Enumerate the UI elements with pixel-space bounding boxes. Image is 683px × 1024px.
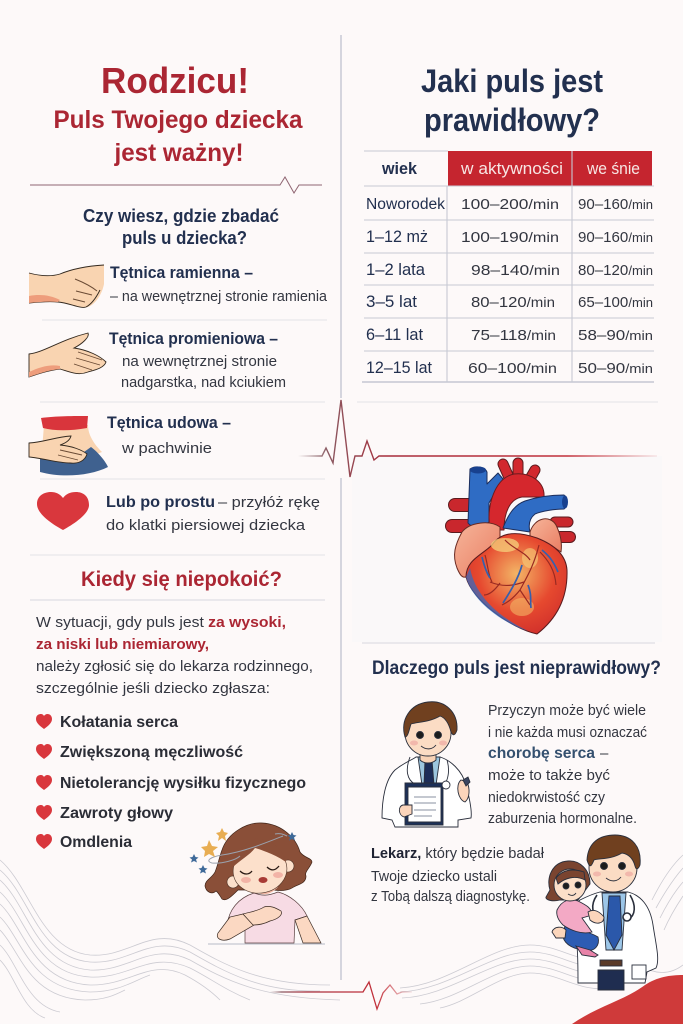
row: 1-12 months: 100–190 /min: [461, 229, 559, 246]
row: 1-2 years: 98–140 /min: [471, 262, 560, 279]
text block: doctor diagnosis: Lekarz, który będzie badał: [371, 845, 545, 862]
icon: belly and hand: [29, 416, 108, 475]
title: Rodzicu!: [101, 60, 249, 101]
title: Puls Twojego dziecka: [54, 106, 304, 134]
row: 12-15 years: 50–90 /min: [578, 360, 653, 377]
heading: why abnormal: Dlaczego puls jest nieprawidłowy?: [372, 658, 661, 679]
panel: hand on chest: – przyłóż rękę: [218, 494, 320, 511]
row: newborn: 90–160/min: [578, 196, 653, 213]
table header: w aktywności: [460, 160, 563, 178]
row: 12-15 years: 12–15 lat: [366, 359, 432, 377]
side vessels: [452, 505, 570, 537]
face: [227, 876, 239, 888]
panel: radial artery: na wewnętrznej stronie: [122, 353, 277, 370]
text block: causes: niedokrwistość czy: [488, 789, 605, 806]
panel: femoral artery: Tętnica udowa –: [107, 414, 231, 432]
panel: femoral artery: w pachwinie: [121, 440, 212, 457]
text block: when to see a doctor: za niski lub niemiarowy,: [36, 636, 209, 653]
row: 1-2 years: 80–120/min: [578, 262, 653, 279]
text block: doctor diagnosis: Twoje dziecko ustali: [371, 868, 497, 885]
heading: where to check: Czy wiesz, gdzie zbadać: [83, 205, 279, 226]
pulmonary artery: [503, 495, 567, 532]
coronary vessels: [484, 540, 556, 605]
table: pulse by age: [362, 151, 654, 382]
heading: what pulse is normal: prawidłowy?: [424, 102, 600, 138]
illustration: dizzy girl: [190, 823, 325, 944]
symptoms list: [36, 714, 306, 851]
arms: [217, 914, 321, 943]
child: [563, 925, 598, 950]
illustration: doctor holding child: [546, 835, 658, 990]
text block: causes: Przyczyn może być wiele: [488, 702, 646, 719]
item: exercise intolerance: Nietolerancję wysiłku fizycznego: [60, 775, 306, 792]
text block: causes: chorobę serca: [488, 745, 595, 762]
text block: causes: zaburzenia hormonalne.: [488, 810, 637, 827]
row: 6-11 years: [366, 326, 653, 344]
heading: where to check: [83, 205, 279, 248]
table header: we śnie: [586, 160, 640, 178]
item: fainting: Omdlenia: [60, 834, 132, 851]
vena cava: [468, 467, 503, 527]
aortic arch: [489, 474, 544, 530]
heart panel background: [352, 456, 662, 642]
text block: doctor diagnosis: [371, 845, 545, 905]
text block: causes: –: [600, 745, 609, 762]
row: newborn: Noworodek: [366, 196, 445, 213]
row: newborn: [366, 196, 653, 213]
panel: femoral artery: [29, 414, 231, 475]
row: 1-2 years: [366, 261, 653, 279]
title: jest ważny!: [114, 139, 243, 167]
ECG divider under title: [30, 177, 322, 193]
item: palpitations: Kołatania serca: [60, 714, 178, 731]
row: 1-12 months: 1–12 mż: [366, 228, 428, 246]
row: 1-12 months: 90–160/min: [578, 229, 653, 246]
panel: brachial artery: – na wewnętrznej stronie ramienia: [110, 288, 328, 305]
row: 3-5 years: [366, 293, 653, 311]
central ECG line: [298, 400, 657, 477]
panel: radial artery: [29, 330, 286, 391]
heading: where to check: puls u dziecka?: [122, 227, 247, 248]
background wave lines: bottom left: [0, 860, 340, 1018]
panel: brachial artery: [29, 264, 328, 307]
icon: open hand: [29, 333, 106, 377]
panel: radial artery: nadgarstka, nad kciukiem: [121, 374, 286, 391]
row: 6-11 years: 58–90 /min: [578, 327, 653, 344]
item: fatigue: Zwiększoną męczliwość: [60, 744, 243, 761]
heading: what pulse is normal: [421, 63, 603, 138]
row: 3-5 years: 3–5 lat: [366, 293, 417, 311]
bottom ECG line: [270, 982, 412, 1009]
table header: wiek: [381, 159, 418, 178]
text block: causes: i nie każda musi oznaczać: [488, 724, 647, 741]
panel: brachial artery: Tętnica ramienna –: [110, 264, 253, 282]
red corner wave: [572, 975, 683, 1024]
shirt: [227, 892, 307, 943]
central vertical divider: [340, 35, 342, 980]
text block: causes: może to także być: [488, 767, 611, 784]
illustration: anatomical heart: [452, 463, 570, 634]
panel: hand on chest: [37, 492, 320, 534]
atria: [455, 523, 500, 577]
heading: when to worry: Kiedy się niepokoić?: [81, 568, 282, 591]
neck: [253, 884, 278, 894]
panel: hand on chest: do klatki piersiowej dziecka: [106, 517, 306, 534]
heading: what pulse is normal: Jaki puls jest: [421, 63, 603, 99]
row: 3-5 years: 65–100/min: [578, 294, 653, 311]
ventricles: [466, 534, 567, 634]
panel: radial artery: Tętnica promieniowa –: [109, 330, 278, 348]
text block: when to see a doctor: szczególnie jeśli dziecko zgłasza:: [36, 680, 270, 697]
icon: arm hand: [29, 265, 104, 307]
table header: [381, 159, 640, 178]
text block: when to see a doctor: należy zgłosić się do lekarza rodzinnego,: [36, 658, 313, 675]
row: 12-15 years: 60–100 /min: [468, 360, 557, 377]
illustration: doctor with clipboard: [382, 702, 471, 827]
row: newborn: 100–200 /min: [461, 196, 559, 213]
background wave lines: bottom right: [400, 855, 683, 1008]
text block: doctor diagnosis: z Tobą dalszą diagnostykę.: [371, 888, 530, 905]
row: 6-11 years: 6–11 lat: [366, 326, 423, 344]
row: 1-2 years: 1–2 lata: [366, 261, 426, 279]
row: 1-12 months: [366, 228, 653, 246]
title: [54, 60, 304, 167]
text block: causes: [488, 702, 647, 827]
text block: when to see a doctor: [36, 614, 313, 697]
row: 12-15 years: [366, 359, 653, 377]
text block: when to see a doctor: W sytuacji, gdy puls jest za wysoki,: [36, 614, 286, 631]
top aortic branches: [503, 463, 535, 484]
row: 3-5 years: 80–120 /min: [471, 294, 555, 311]
item: dizziness: Zawroty głowy: [60, 805, 173, 822]
icon: heart: [37, 492, 89, 530]
row: 6-11 years: 75–118 /min: [471, 327, 556, 344]
panel: hand on chest: Lub po prostu: [106, 494, 215, 511]
hair: [205, 823, 312, 900]
